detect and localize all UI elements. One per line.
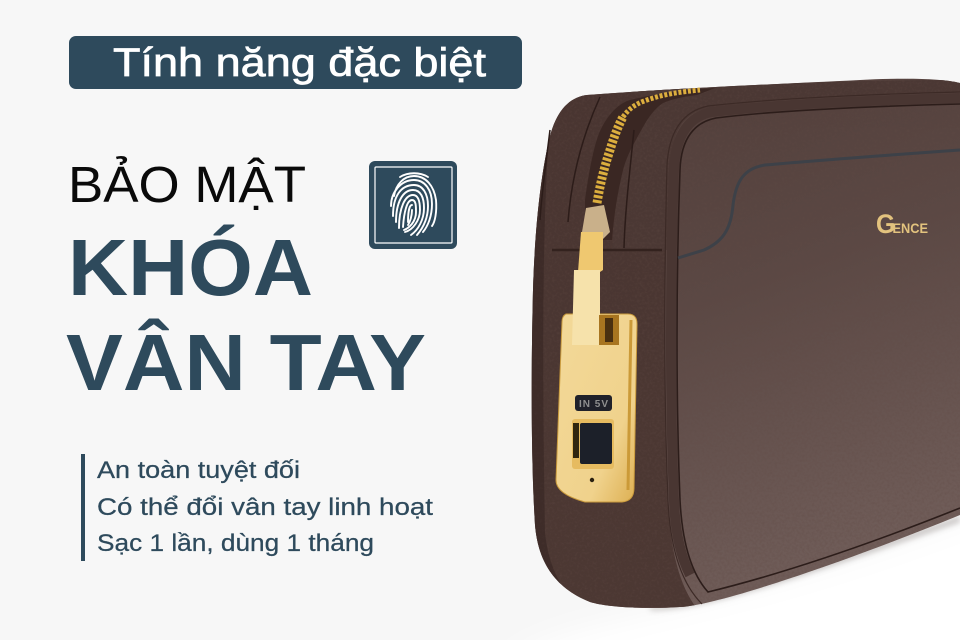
feature list: Có thể đổi vân tay linh hoạt [97, 494, 433, 521]
zipper tape [585, 88, 715, 240]
logo: GENCE: GENCE [876, 209, 928, 239]
zipper pull [578, 205, 610, 272]
piping and stitching [540, 92, 960, 604]
charging port label: IN 5V [579, 399, 608, 410]
bag [525, 70, 960, 615]
icon: fingerprint [369, 161, 457, 249]
fingerprint sensor [572, 419, 614, 469]
fingerprint lock [556, 270, 637, 502]
heading banner: Tính năng đặc biệt [69, 36, 522, 89]
bag body [525, 70, 960, 615]
heading: BẢO MẬT: BẢO MẬT [68, 155, 306, 213]
zipper teeth [597, 90, 700, 203]
feature list: An toàn tuyệt đối [97, 457, 300, 484]
floor shadow under bag [650, 516, 960, 610]
feature list [81, 454, 433, 561]
front pocket edge [678, 150, 960, 258]
heading: VÂN TAY: VÂN TAY [66, 318, 426, 407]
charging port label [575, 395, 612, 411]
feature list: Sạc 1 lần, dùng 1 tháng [97, 530, 374, 557]
heading: KHÓA: KHÓA [68, 223, 313, 312]
heading banner: Tính năng đặc biệt: Tính năng đặc biệt [113, 41, 486, 85]
white floor glow under bag [500, 490, 960, 640]
